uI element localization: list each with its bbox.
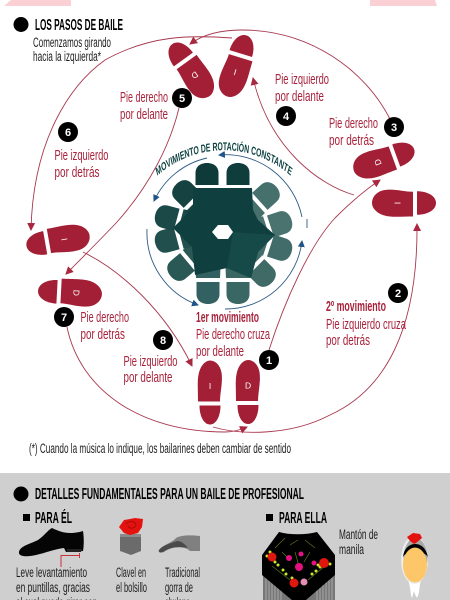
- step 6 label: [54, 148, 108, 181]
- footnote: (*) Cuando la música lo indique, los bailarines deben cambiar de sentido: [29, 441, 291, 456]
- decorative top tabs: [4, 0, 437, 6]
- step 7 label: [80, 310, 129, 343]
- step 8 label: por delante: [124, 370, 172, 386]
- footprint: step 7: D: [71, 290, 82, 296]
- step 4 label: Pie izquierdo: [275, 72, 329, 88]
- step 4 number: 4: [283, 111, 290, 123]
- step 2 number: 2: [395, 288, 401, 300]
- footprint: step 7: [37, 277, 103, 308]
- shoe caption: en puntillas, gracias: [16, 580, 90, 595]
- subheading: para el: [23, 508, 72, 527]
- heading: detalles fundamentales: [14, 486, 304, 503]
- shawl caption: manila: [339, 542, 364, 557]
- step 1 number: 1: [266, 355, 272, 367]
- step 2 number: [388, 283, 408, 303]
- step 3 label: [329, 116, 378, 149]
- step 4 number: [276, 106, 296, 126]
- footprint: step 6: [24, 221, 92, 259]
- subheading: para ella: [266, 510, 327, 527]
- footprint: step 5: D: [189, 69, 200, 81]
- icon: black dress shoe: [19, 528, 84, 556]
- step 5 number: [172, 88, 192, 108]
- intro text: Comenzamos girando: [33, 35, 111, 50]
- heading: los pasos de baile: LOS PASOS DE BAILE: [35, 17, 123, 34]
- icon: red carnation: [119, 518, 143, 535]
- footprints: step 1 and 8, bottom pair: I: [209, 381, 211, 391]
- step 1 label: [196, 310, 271, 360]
- cap caption: [165, 565, 200, 600]
- step 5 label: por delante: [120, 107, 168, 123]
- shoe caption: Leve levantamiento: [16, 565, 87, 580]
- carnation caption: el bolsillo: [116, 580, 147, 595]
- step 5 label: Pie derecho: [120, 90, 168, 106]
- step 2 label: Pie izquierdo cruza: [326, 317, 407, 333]
- shawl caption: [339, 527, 378, 557]
- step 1 label: por delante: [196, 344, 244, 360]
- panel: details: [0, 473, 450, 600]
- footprint: step 5: [161, 36, 221, 104]
- step 1 label: Pie derecho cruza: [196, 327, 271, 343]
- step 6 label: por detrás: [54, 165, 100, 181]
- curved label: movimiento de rotacion constante: MOVIMIENTO DE ROTACIÓN CONSTANTE: [155, 142, 293, 176]
- step 8 number: [153, 330, 173, 350]
- footprint: step 3: [349, 137, 419, 184]
- carnation caption: Clavel en: [116, 565, 146, 580]
- step 3 number: [384, 117, 404, 137]
- step 3 label: Pie derecho: [329, 116, 378, 132]
- carnation caption: [116, 565, 147, 595]
- icon: pocket: [120, 534, 141, 555]
- step 8 number: 8: [160, 335, 166, 347]
- step 3 number: 3: [391, 122, 397, 134]
- heading: los pasos de baile: [14, 17, 123, 34]
- icon: flat cap: [159, 535, 200, 553]
- footprints: step 1 and 8, bottom pair: [198, 360, 260, 424]
- step 7 number: [54, 307, 74, 327]
- cap caption: gorra de: [165, 580, 193, 595]
- step 7 label: Pie derecho: [80, 310, 129, 326]
- step 4 label: [275, 72, 329, 105]
- rotating footprints diagram: [152, 163, 295, 304]
- footprint: step 4: I: [233, 67, 238, 77]
- step 2 label: por detrás: [326, 333, 370, 349]
- footprint: step 3: D: [372, 158, 384, 167]
- step 2 label: 2º movimiento: [326, 299, 386, 315]
- shawl caption: Mantón de: [339, 527, 378, 542]
- subheading: para ella: PARA ELLA: [279, 510, 327, 527]
- icon: woman's head with flower: [401, 533, 428, 598]
- step 7 number: 7: [61, 312, 67, 324]
- footprint: step 2: I: [392, 202, 402, 204]
- step 2 label: [326, 299, 407, 349]
- step 7 label: por detrás: [80, 327, 125, 343]
- step 6 label: Pie izquierdo: [54, 148, 108, 164]
- step arrows: [31, 30, 417, 432]
- footprint: step 4: [215, 31, 259, 101]
- footprint: step 2: [372, 190, 436, 217]
- footprints: step 1 and 8, bottom pair: D: [245, 380, 251, 390]
- step 3 label: por detrás: [329, 133, 374, 149]
- icon: lift marker: [61, 553, 80, 567]
- step 8 label: [124, 354, 178, 386]
- step 6 number: 6: [65, 127, 71, 139]
- shoe caption: [16, 565, 97, 600]
- step 1 number: [259, 350, 279, 370]
- step 4 label: por delante: [275, 89, 324, 105]
- rotation arc arrows: [147, 155, 307, 309]
- icon: manton de manila: [262, 532, 335, 600]
- step 1 label: 1er movimiento: [196, 310, 259, 326]
- intro text: [33, 35, 111, 64]
- step 5 label: [120, 90, 168, 123]
- step 5 number: 5: [179, 93, 185, 105]
- footprint: step 6: I: [59, 237, 70, 241]
- intro text: hacia la izquierda*: [33, 49, 101, 64]
- step 8 label: Pie izquierdo: [124, 354, 178, 370]
- step 6 number: [58, 122, 78, 142]
- cap caption: Tradicional: [165, 565, 200, 580]
- subheading: para el: PARA ÉL: [35, 508, 72, 527]
